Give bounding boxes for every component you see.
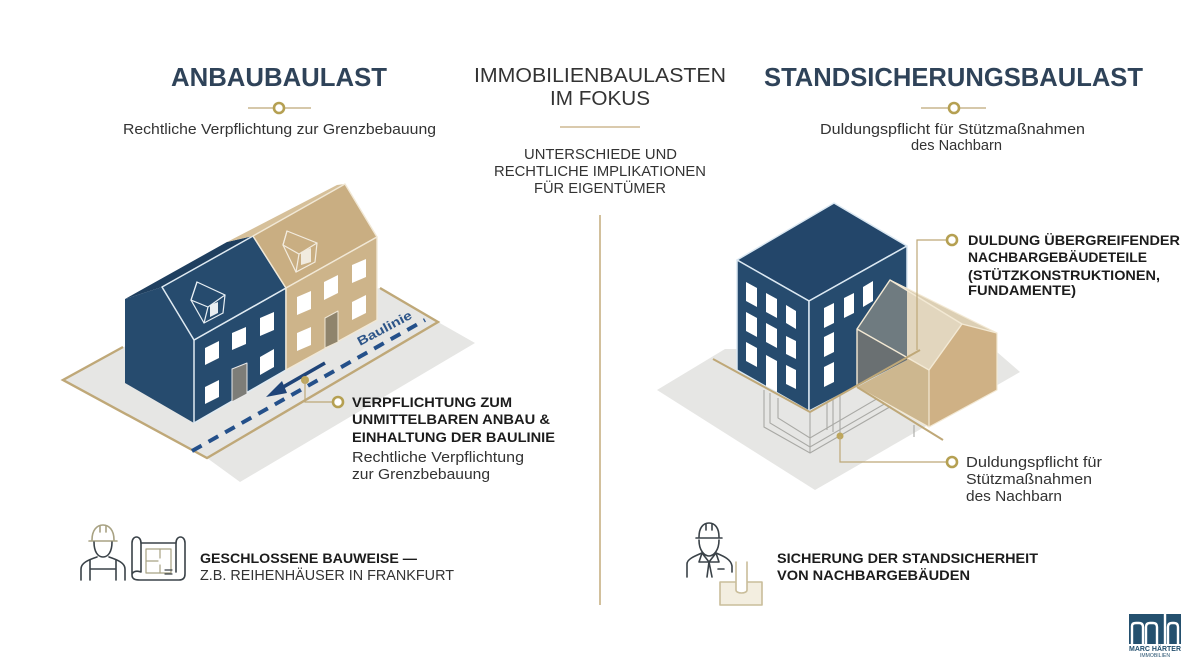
icon: construction worker	[81, 525, 125, 580]
callout text: Stützmaßnahmen	[966, 455, 1102, 505]
subtitle: Standsicherungsbaulast: Duldungspflicht für Stützmaßnahmen	[820, 122, 1085, 138]
callout text: Anbau: Rechtliche Verpflichtung	[352, 450, 524, 466]
building line	[192, 308, 425, 451]
dormer on blue house	[191, 282, 225, 323]
text: closed construction: Z.B. REIHENHÄUSER IN FRANKFURT	[200, 567, 454, 584]
callout text: Duldung	[968, 232, 1180, 298]
foundations	[764, 360, 914, 453]
callout text: Duldung: FUNDAMENTE)	[968, 282, 1076, 298]
property line	[713, 350, 943, 440]
blue house	[125, 236, 286, 423]
callout text: Anbau: VERPFLICHTUNG ZUM	[352, 394, 512, 410]
central subtitle: UNTERSCHIEDE UND	[524, 147, 677, 163]
callout text: Anbau	[352, 394, 555, 483]
heading: Anbaubaulast: ANBAUBAULAST	[171, 62, 387, 92]
text: stability: SICHERUNG DER STANDSICHERHEIT	[777, 550, 1038, 566]
text: closed construction	[200, 550, 454, 584]
central subtitle: FÜR EIGENTÜMER	[534, 179, 666, 197]
logo: IMMOBILIEN	[1140, 653, 1170, 659]
text: closed construction: GESCHLOSSENE BAUWEISE —	[200, 550, 417, 566]
arrow	[266, 363, 325, 397]
subtitle: Standsicherungsbaulast	[820, 122, 1085, 154]
illustration: row houses on building line	[63, 184, 475, 482]
callout text: Anbau: zur Grenzbebauung	[352, 467, 490, 483]
callout text: Stützmaßnahmen: Stützmaßnahmen	[966, 472, 1092, 488]
subtitle: Standsicherungsbaulast: des Nachbarn	[911, 138, 1002, 154]
central subtitle: RECHTLICHE IMPLIKATIONEN	[494, 164, 706, 180]
text: stability: VON NACHBARGEBÄUDEN	[777, 567, 970, 583]
blue building	[737, 203, 907, 411]
callout text: Stützmaßnahmen: Duldungspflicht für	[966, 455, 1102, 471]
heading: Standsicherungsbaulast: STANDSICHERUNGSBAULAST	[764, 62, 1143, 92]
callout text: Duldung: NACHBARGEBÄUDETEILE	[968, 249, 1147, 265]
callout text: Duldung: DULDUNG ÜBERGREIFENDER	[968, 232, 1180, 248]
central subtitle	[494, 147, 706, 197]
ground plot	[63, 288, 475, 482]
central title: IM FOKUS	[550, 88, 650, 110]
tan neighbouring house	[857, 280, 997, 427]
callout marker	[301, 376, 343, 407]
illustration: tall building with neighbouring house	[657, 203, 1020, 490]
icon: engineer with foundation	[687, 523, 762, 605]
callout text: Duldung: (STÜTZKONSTRUKTIONEN,	[968, 267, 1160, 283]
callout text: Anbau: UNMITTELBAREN ANBAU &	[352, 411, 550, 427]
central title: IMMOBILIENBAULASTEN	[474, 65, 726, 87]
heading: Anbaubaulast	[171, 62, 387, 113]
heading: Standsicherungsbaulast	[764, 62, 1143, 113]
text: stability	[777, 550, 1038, 583]
central title	[474, 65, 726, 127]
callout text: Anbau: EINHALTUNG DER BAULINIE	[352, 429, 555, 445]
subtitle: Anbaubaulast: Rechtliche Verpflichtung zur Grenzbebauung	[123, 122, 436, 138]
building line: Baulinie	[355, 308, 414, 349]
upper callout marker	[917, 235, 957, 350]
lower callout marker	[836, 432, 957, 467]
tan house	[227, 184, 377, 370]
logo: MARC HÄRTER	[1129, 645, 1181, 653]
ground plot	[657, 349, 1020, 490]
icon: blueprint	[132, 537, 185, 580]
logo	[1129, 614, 1181, 659]
callout text: Stützmaßnahmen: des Nachbarn	[966, 489, 1062, 505]
dormer on tan house	[283, 231, 317, 272]
